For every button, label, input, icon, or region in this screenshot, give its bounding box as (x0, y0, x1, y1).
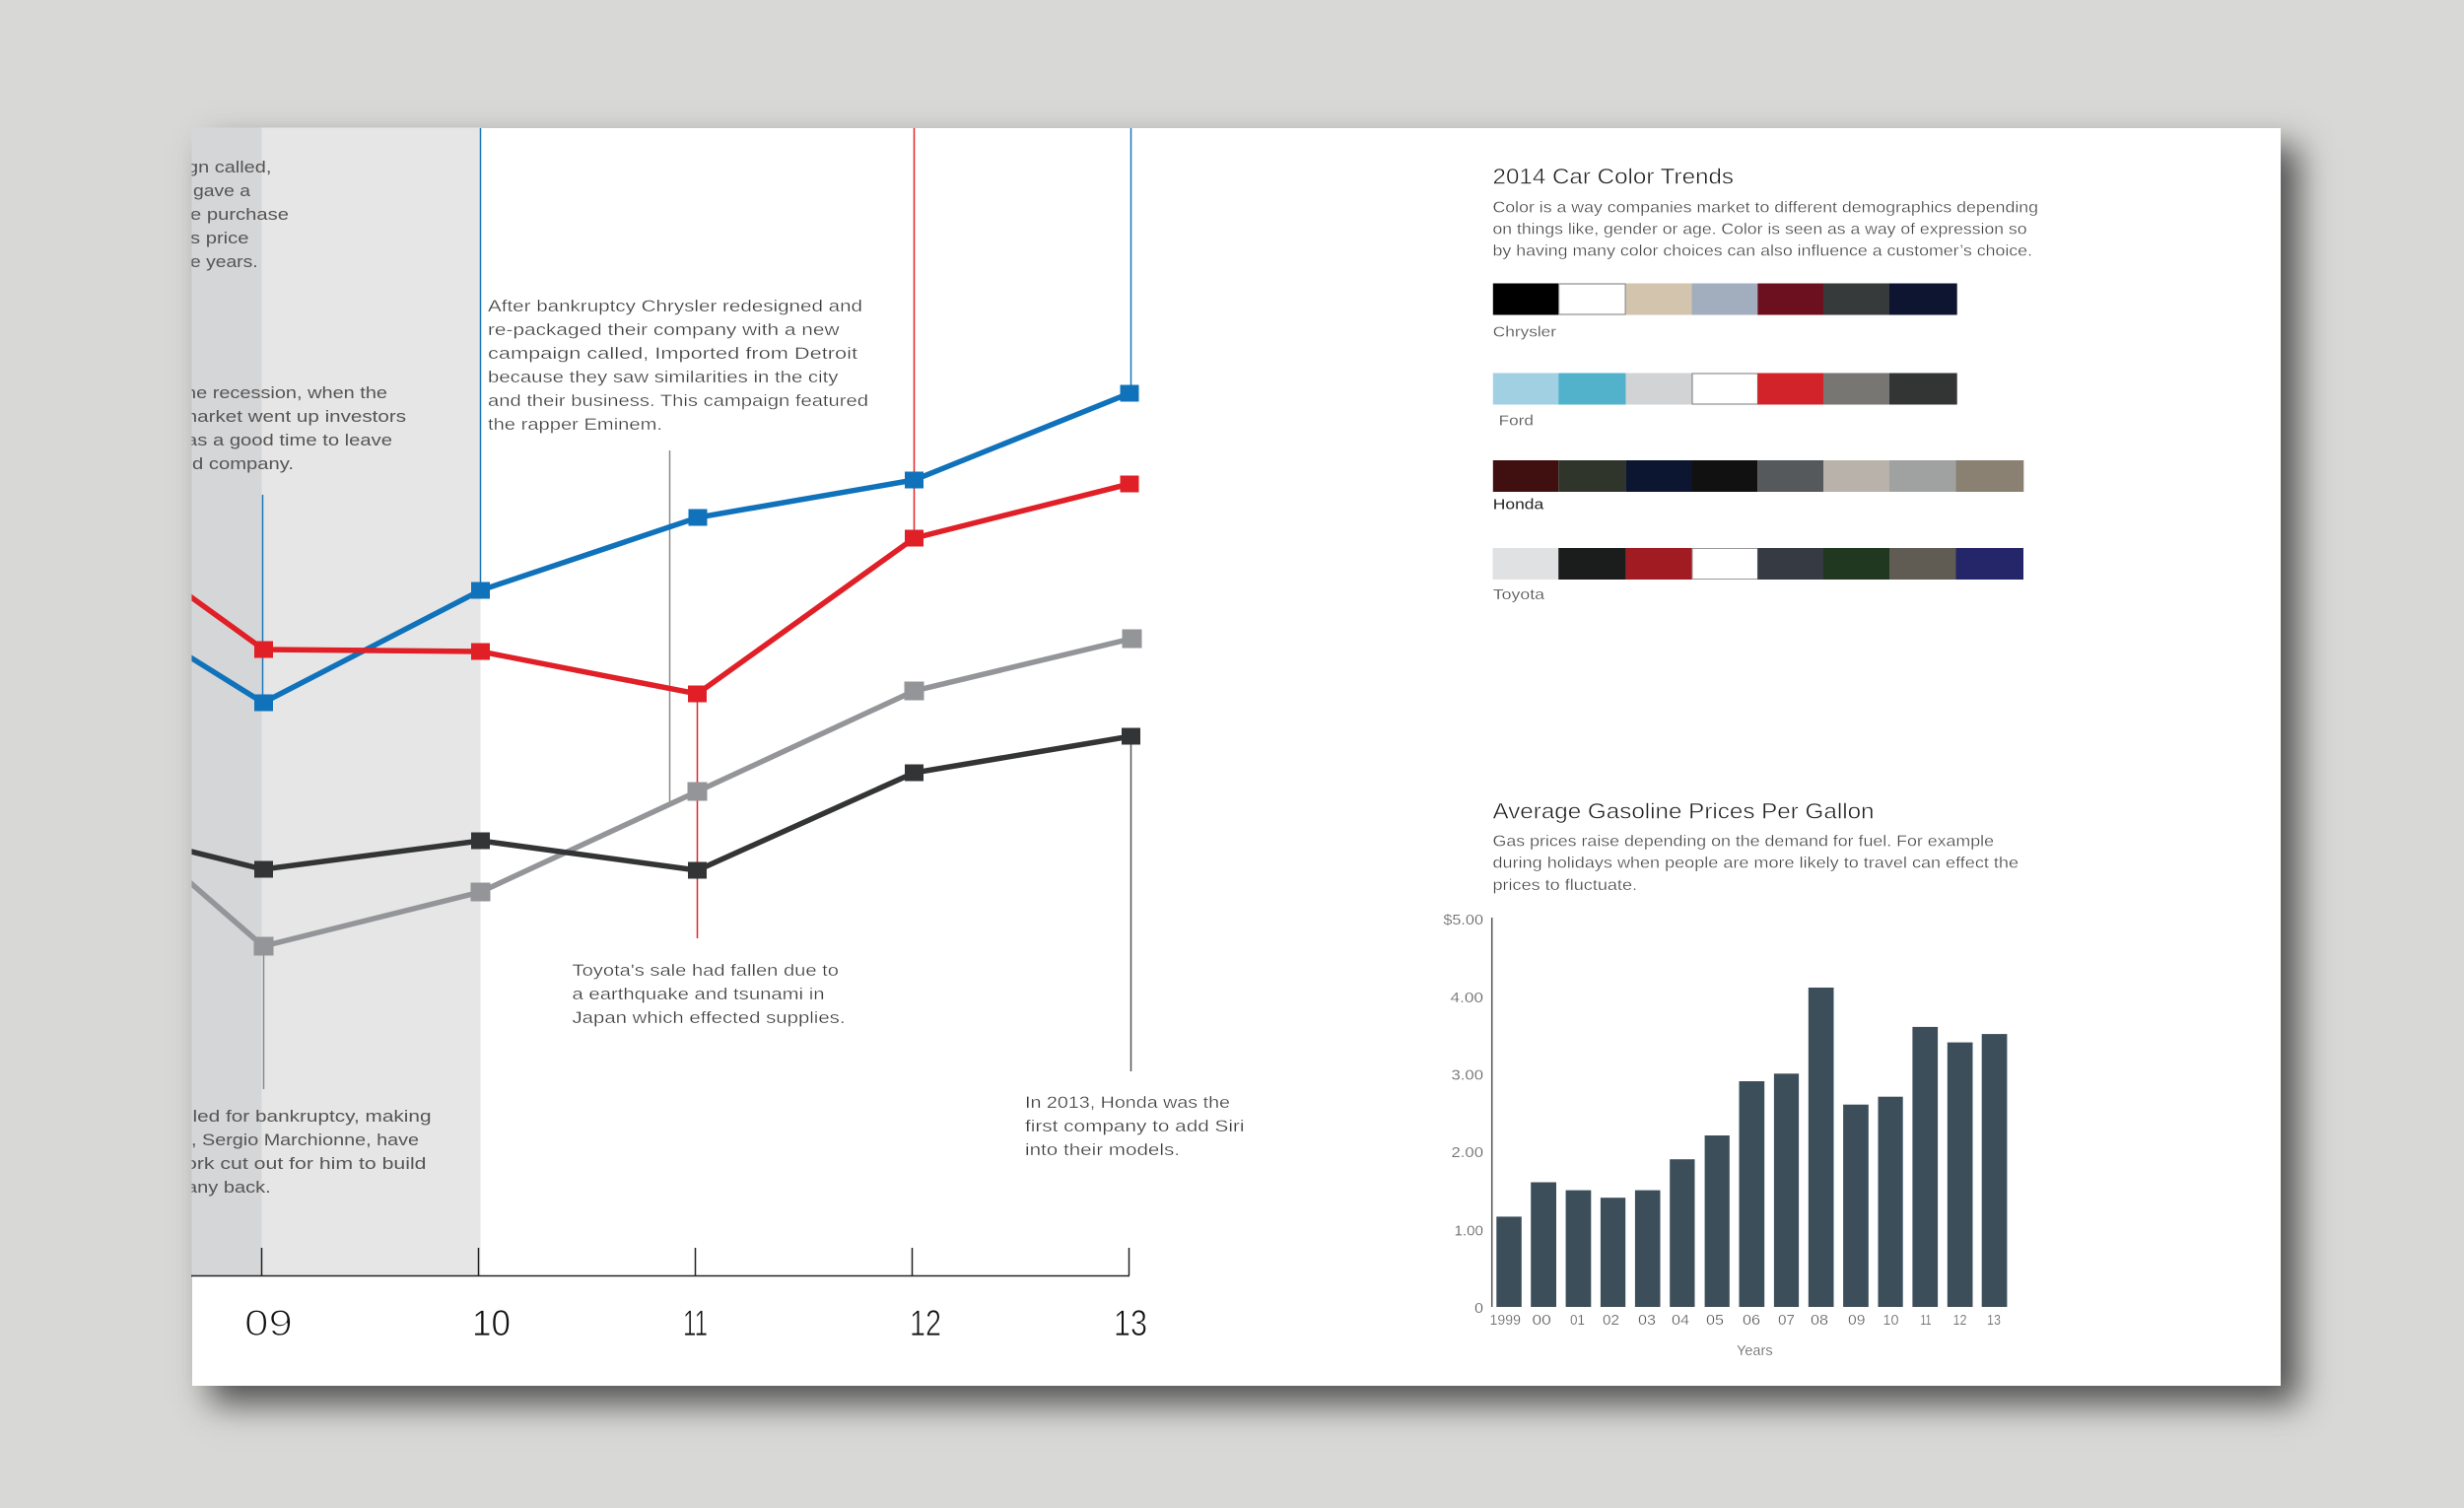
x axis year labels: 07 (1778, 1313, 1795, 1329)
timeline year labels: 09 (244, 1303, 293, 1343)
swatches: Honda (1493, 460, 2023, 492)
callout: 2009 campaign note: gn called, (187, 158, 271, 176)
description: on things like, gender or age. Color is seen as a way of expression so (1492, 221, 2027, 238)
y axis labels (1443, 913, 1483, 1317)
swatches: Ford (1493, 373, 1957, 404)
x axis year labels: 13 (1987, 1313, 2001, 1329)
label: Ford: Ford (1499, 413, 1534, 430)
callout: Imported from Detroit note (488, 297, 868, 434)
callout: recession investors note: he recession, when the (185, 383, 387, 402)
callout: Chrysler bankruptcy note (185, 1107, 432, 1197)
callout: Imported from Detroit note: and their business. This campaign featured (488, 391, 868, 410)
x axis year labels: 04 (1672, 1313, 1689, 1329)
callout: 2009 campaign note: s price (190, 229, 248, 247)
callout: Imported from Detroit note: campaign called, Imported from Detroit (488, 344, 857, 363)
x axis year labels: 01 (1570, 1313, 1585, 1329)
callout: Honda Siri note: In 2013, Honda was the (1025, 1093, 1230, 1112)
x axis year labels: 02 (1603, 1313, 1619, 1329)
callout: Imported from Detroit note: because they saw similarities in the city (488, 368, 839, 386)
line: Honda gray (187, 629, 1141, 956)
callout: Toyota earthquake note: Toyota's sale had fallen due to (572, 961, 839, 980)
description: Color is a way companies market to different demographics depending (1492, 199, 2038, 216)
label: Honda: Honda (1493, 497, 1544, 514)
callout: Chrysler bankruptcy note: , Sergio Marchionne, have (191, 1131, 419, 1149)
heading: 2014 Car Color Trends (1492, 165, 1734, 189)
x axis year labels: 12 (1953, 1313, 1967, 1329)
description (1492, 834, 2019, 894)
white page sheet with drop shadow (191, 128, 2281, 1386)
y axis labels: $5.00 (1443, 913, 1483, 928)
timeline year labels: 11 (683, 1303, 708, 1343)
x axis year labels: 03 (1638, 1313, 1656, 1329)
description: Gas prices raise depending on the demand for fuel. For example (1492, 834, 1994, 851)
artwork layer (191, 128, 2037, 1355)
y axis labels: 0 (1474, 1301, 1483, 1317)
x axis year labels: 10 (1882, 1313, 1898, 1329)
y axis labels: 4.00 (1451, 991, 1483, 1006)
callout: Imported from Detroit note: the rapper Eminem. (488, 415, 662, 434)
y axis labels: 2.00 (1451, 1145, 1483, 1161)
heading: Average Gasoline Prices Per Gallon (1492, 799, 1875, 824)
callout: Imported from Detroit note: After bankruptcy Chrysler redesigned and (488, 297, 862, 315)
callout: recession investors note (180, 383, 406, 473)
callout: recession investors note: d company. (192, 454, 294, 473)
x axis year labels: 08 (1811, 1313, 1828, 1329)
callout: Honda Siri note: into their models. (1025, 1140, 1180, 1159)
callout: 2009 campaign note (187, 158, 289, 271)
callout: Imported from Detroit note: re-packaged their company with a new (488, 320, 840, 339)
x axis year labels: 06 (1743, 1313, 1760, 1329)
callout: Chrysler bankruptcy note: any back. (186, 1178, 271, 1197)
callout leader lines (262, 128, 1131, 1089)
description: prices to fluctuate. (1492, 877, 1637, 894)
x axis year labels: 1999 (1490, 1313, 1521, 1329)
description: during holidays when people are more likely to travel can effect the (1492, 856, 2019, 872)
callout: 2009 campaign note: e purchase (190, 205, 289, 224)
callout: recession investors note: as a good time to leave (186, 431, 392, 449)
y axis labels: 3.00 (1451, 1068, 1483, 1084)
line: Chrysler black (187, 727, 1140, 879)
line: Ford blue (187, 384, 1139, 712)
label: Chrysler: Chrysler (1493, 324, 1556, 341)
recession background bands (191, 127, 481, 1275)
timeline year labels: 12 (910, 1303, 941, 1343)
description (1492, 199, 2038, 259)
callout: 2009 campaign note: gave a (193, 181, 251, 200)
swatches: Chrysler (1493, 284, 1957, 315)
callout: Toyota earthquake note: Japan which effected supplies. (572, 1008, 846, 1027)
swatches: Toyota (1492, 548, 2023, 580)
callout: Honda Siri note (1025, 1093, 1244, 1159)
callout: Honda Siri note: first company to add Siri (1025, 1117, 1244, 1135)
x axis year labels: 00 (1532, 1313, 1551, 1329)
callout: 2009 campaign note: e years. (190, 252, 258, 271)
panel: sales timeline line chart (180, 127, 1141, 1275)
timeline year labels (244, 1303, 1147, 1343)
description: by having many color choices can also influence a customer’s choice. (1492, 242, 2032, 259)
timeline year labels: 10 (472, 1303, 511, 1343)
x axis year labels (1490, 1313, 2001, 1329)
callout: Toyota earthquake note: a earthquake and tsunami in (572, 985, 824, 1003)
timeline axis with ticks (191, 1248, 1129, 1275)
callout: Toyota earthquake note (572, 961, 846, 1027)
callout: recession investors note: market went up investors (180, 407, 406, 426)
callout: Chrysler bankruptcy note: led for bankruptcy, making (193, 1107, 432, 1126)
bars (1496, 988, 2007, 1307)
y axis labels: 1.00 (1455, 1224, 1483, 1240)
panel: 2014 car color trends (1492, 165, 2038, 603)
label: Toyota: Toyota (1493, 586, 1545, 603)
line: Toyota red (187, 475, 1139, 702)
x axis title: Years (1737, 1343, 1773, 1359)
x axis year labels: 05 (1706, 1313, 1724, 1329)
x axis year labels: 11 (1920, 1313, 1932, 1329)
timeline year labels: 13 (1114, 1303, 1147, 1343)
y axis line (1491, 918, 1493, 1307)
x axis year labels: 09 (1848, 1313, 1865, 1329)
panel: average gasoline prices per gallon (1443, 799, 2019, 1359)
callout: Chrysler bankruptcy note: ork cut out for him to build (185, 1154, 426, 1173)
